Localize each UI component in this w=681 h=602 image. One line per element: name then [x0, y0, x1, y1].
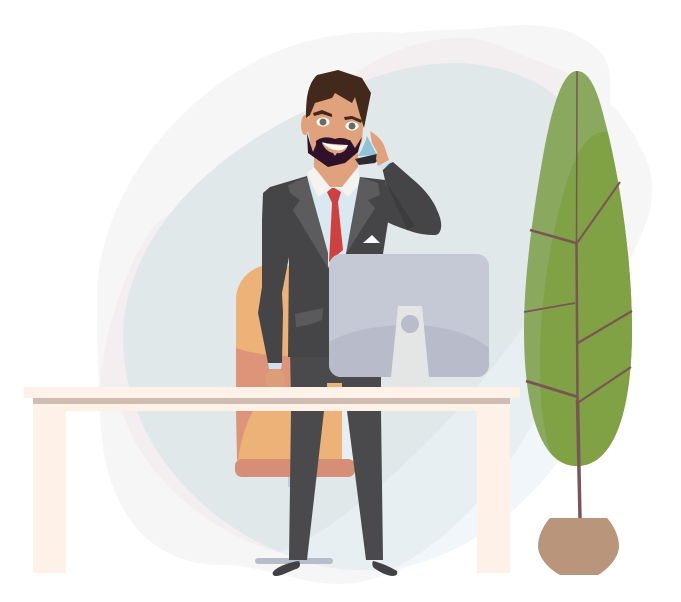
lapels	[288, 177, 380, 268]
pot	[538, 518, 619, 575]
pale blue inner blob	[280, 270, 580, 570]
monitor stand hole	[401, 315, 419, 333]
smile	[322, 142, 348, 150]
plant	[524, 71, 640, 575]
beard	[307, 133, 362, 167]
monitor	[329, 254, 489, 387]
desk under strip	[33, 398, 510, 404]
outer grey blob	[97, 25, 652, 584]
eyebrows	[313, 110, 362, 123]
shirt cuffs	[268, 160, 393, 369]
leaf shade	[540, 132, 632, 466]
lower lip	[322, 143, 348, 156]
trousers	[289, 350, 383, 560]
chair stem	[288, 477, 294, 487]
collar	[307, 167, 360, 197]
shoes	[273, 561, 397, 576]
desk	[24, 387, 520, 573]
chair lower	[236, 411, 342, 460]
chair back shade	[236, 348, 290, 387]
desk right leg	[477, 411, 510, 573]
jacket pocket	[295, 308, 323, 327]
businessman	[258, 70, 441, 576]
pink overlap blob	[100, 38, 600, 553]
chair	[235, 266, 355, 564]
arm shadow	[387, 183, 415, 229]
eyes	[316, 118, 330, 126]
ear	[301, 115, 309, 135]
leaf	[524, 71, 632, 466]
hand on chair	[265, 369, 285, 389]
neck	[314, 150, 358, 188]
face	[308, 92, 364, 167]
leaf veins and stem	[524, 71, 632, 518]
hand on phone	[370, 131, 389, 166]
pale blue outer blob	[280, 280, 600, 568]
pocket square	[363, 235, 380, 243]
chair back	[236, 266, 342, 411]
jacket	[258, 176, 388, 363]
chair gap	[342, 411, 355, 460]
desk top	[24, 387, 520, 398]
phone	[358, 136, 377, 156]
monitor stand	[389, 306, 431, 387]
desk left leg	[33, 411, 66, 573]
chair base	[255, 558, 333, 564]
hair	[306, 70, 371, 128]
background blobs	[97, 25, 652, 584]
right arm	[382, 162, 441, 235]
moustache and goatee	[316, 137, 353, 160]
chair peek	[327, 383, 342, 387]
monitor shade	[329, 325, 489, 377]
shirt	[307, 172, 360, 262]
monitor back	[329, 254, 489, 377]
chair seat	[235, 459, 355, 477]
tie	[327, 187, 343, 262]
main blue blob	[123, 63, 600, 552]
